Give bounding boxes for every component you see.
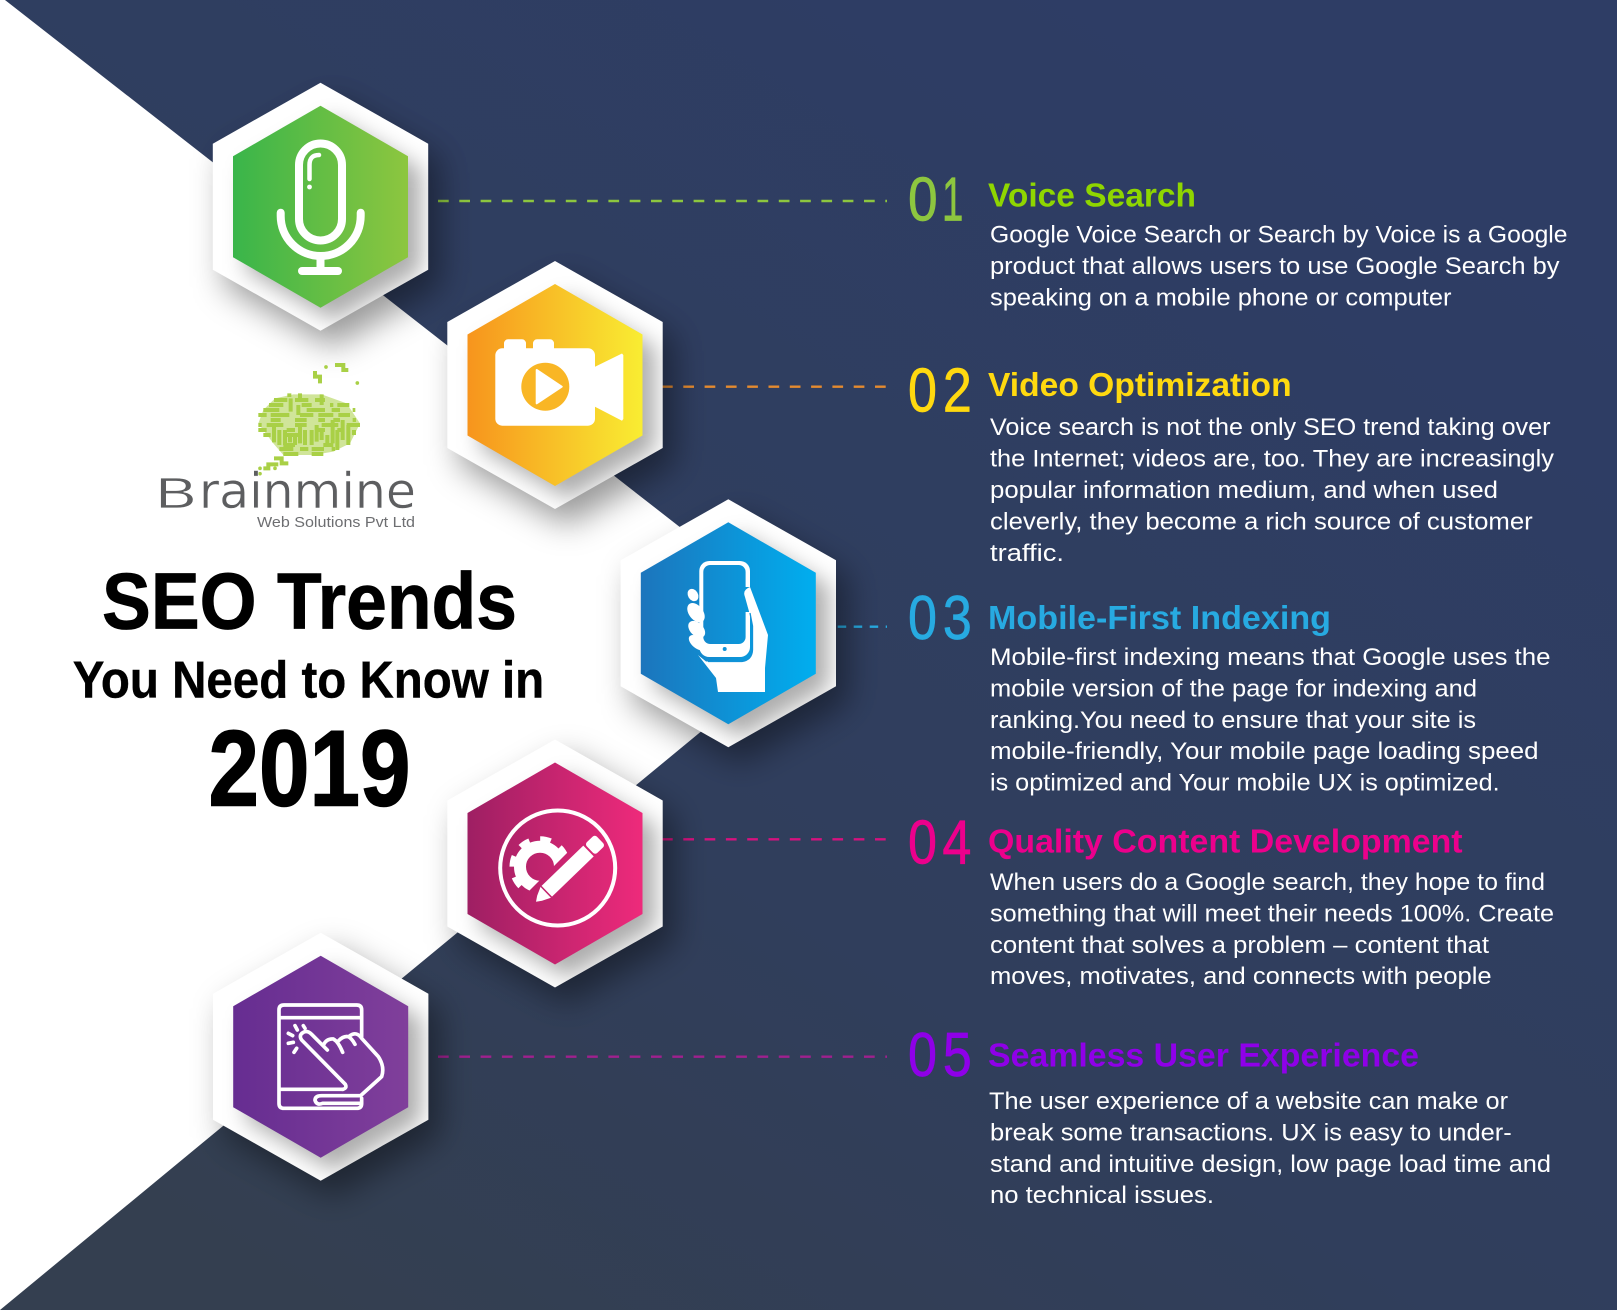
body text 04: content that solves a problem – content that <box>990 932 1489 959</box>
hexagon: seamless user experience <box>213 933 440 1197</box>
number 01: 1 <box>942 164 963 234</box>
logo wordmark: B <box>154 470 198 518</box>
body text 04: When users do a Google search, they hope to find <box>990 869 1545 896</box>
title: SEO Trends <box>102 556 517 645</box>
body text 02: the Internet; videos are, too. They are increasingly <box>990 446 1554 472</box>
number 05: 05 <box>908 1021 972 1090</box>
body text 05: stand and intuitive design, low page load time and <box>990 1151 1551 1178</box>
body text 02: popular information medium, and when used <box>990 477 1498 504</box>
body text 02: cleverly, they become a rich source of customer <box>990 508 1533 536</box>
section 01: voice search <box>908 164 1568 311</box>
title: You Need to Know in <box>73 652 544 710</box>
dashed connector 05 <box>438 1055 887 1058</box>
body text 05: no technical issues. <box>990 1182 1214 1209</box>
body text 03: mobile version of the page for indexing and <box>990 675 1477 702</box>
section 02: video optimization <box>908 356 1554 567</box>
logo wordmark: rainmine <box>199 463 416 520</box>
icon: microphone <box>281 144 361 275</box>
icon: gear and pencil in circle <box>500 810 640 935</box>
heading: Voice Search: Voice Search <box>988 177 1196 214</box>
logo: Brainmine <box>154 365 416 531</box>
body text 02 <box>990 414 1554 567</box>
title: 2019 <box>208 708 410 829</box>
body text 03: is optimized and Your mobile UX is optimized. <box>990 770 1500 797</box>
dashed connector 01 <box>438 200 887 202</box>
body text 05 <box>989 1088 1551 1209</box>
body text 01: speaking on a mobile phone or computer <box>990 284 1452 311</box>
body text 03: ranking.You need to ensure that your site is <box>990 707 1476 734</box>
hexagon: voice search <box>213 83 440 347</box>
body text 04: something that will meet their needs 100%. Create <box>990 900 1554 927</box>
body text 05: break some transactions. UX is easy to under- <box>990 1119 1512 1146</box>
dashed connector 03 <box>838 626 887 628</box>
dashed connector 04 <box>662 838 887 840</box>
heading: Seamless User Experience: Seamless User Experience <box>988 1037 1419 1074</box>
body text 04: moves, motivates, and connects with people <box>990 963 1492 990</box>
white left triangle panel <box>0 0 818 1310</box>
icon: video camera <box>495 339 623 426</box>
hexagon: quality content development <box>447 740 675 1004</box>
dashed connector 02 <box>662 386 887 388</box>
body text 02: Voice search is not the only SEO trend taking over <box>990 414 1550 441</box>
hexagon: mobile-first indexing <box>621 499 848 763</box>
body text 01: product that allows users to use Google Search by <box>990 253 1560 280</box>
hexagon: video optimization <box>447 261 675 525</box>
section 03: mobile-first indexing <box>908 584 1550 797</box>
icon: hand tapping tablet <box>279 1005 383 1108</box>
number 03: 03 <box>908 584 972 653</box>
body text 01: Google Voice Search or Search by Voice is a Google <box>990 221 1568 248</box>
icon: hand holding phone <box>684 561 768 692</box>
number 01 <box>908 164 963 235</box>
body text 04 <box>990 869 1554 990</box>
body text 03: Mobile-first indexing means that Google uses the <box>990 644 1550 671</box>
logo: maze brain speech bubble <box>258 365 360 475</box>
body text 03: mobile-friendly, Your mobile page loading speed <box>990 738 1538 765</box>
body text 05: The user experience of a website can make or <box>989 1088 1508 1115</box>
number 04: 04 <box>908 808 971 878</box>
number 01: 0 <box>908 166 938 235</box>
section 04: quality content development <box>908 808 1554 990</box>
body text 02: traffic. <box>990 540 1064 567</box>
heading: Quality Content Development: Quality Content Development <box>988 823 1463 860</box>
body text 03 <box>990 644 1550 797</box>
logo tagline: Web Solutions Pvt Ltd <box>257 514 415 531</box>
heading: Video Optimization: Video Optimization <box>988 366 1292 403</box>
body text 01 <box>990 221 1568 311</box>
number 02: 02 <box>908 356 972 426</box>
heading: Mobile-First Indexing: Mobile-First Indexing <box>988 599 1331 636</box>
section 05: seamless user experience <box>908 1021 1551 1209</box>
title <box>73 556 544 829</box>
